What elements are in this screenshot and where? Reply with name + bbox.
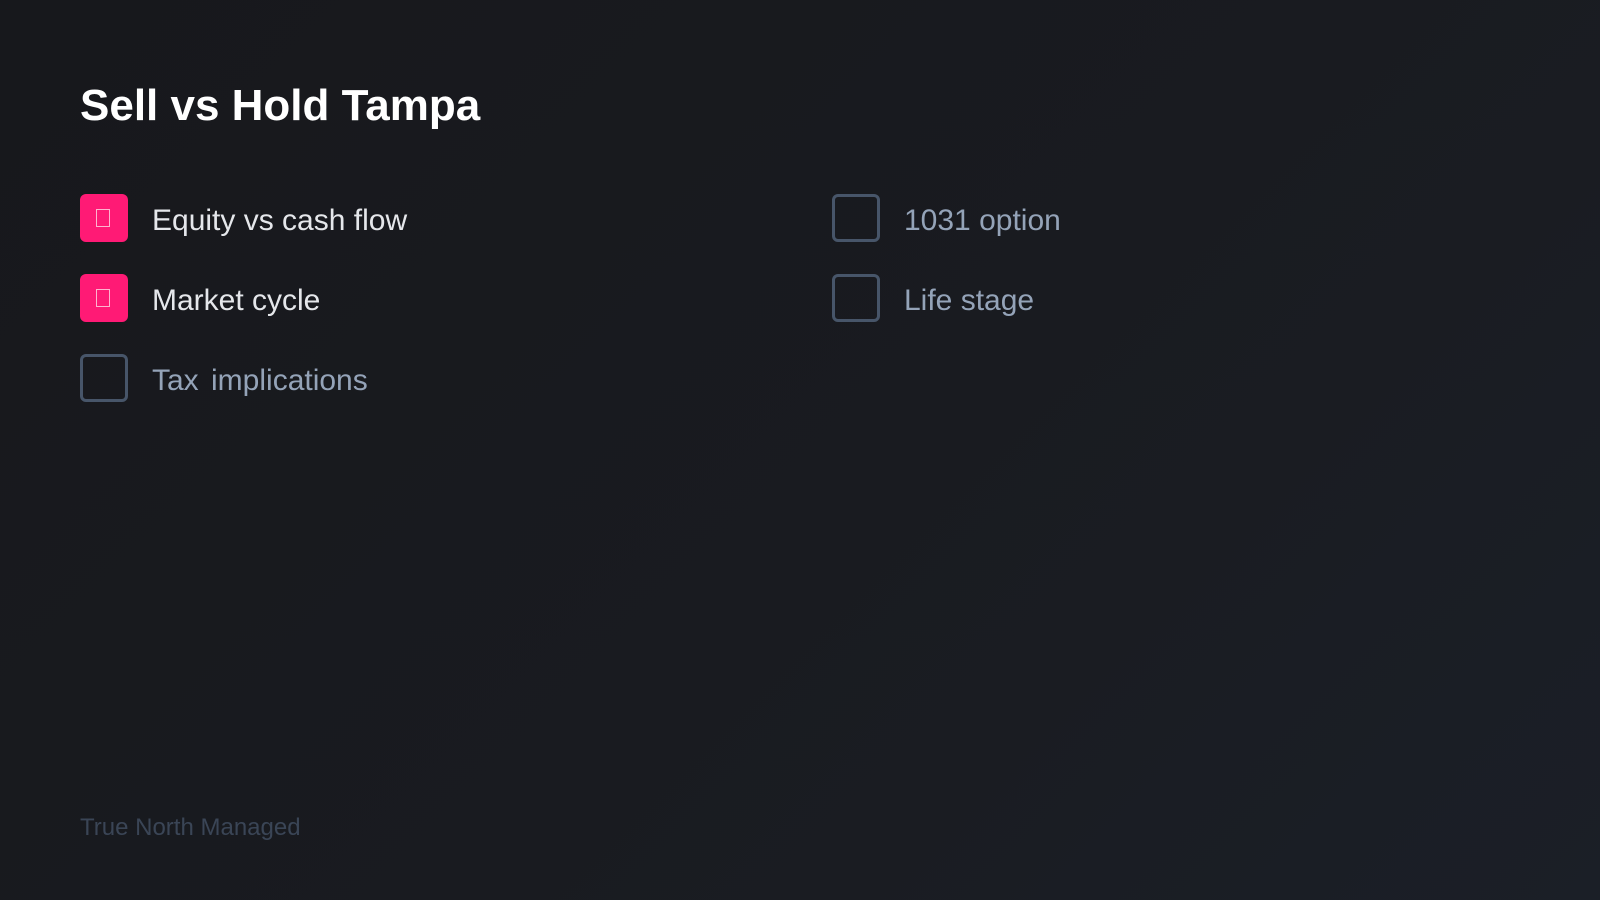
item: Market cycle	[80, 274, 320, 322]
footer: True North Managed	[80, 814, 301, 841]
item: Equity vs cash flow	[80, 194, 408, 242]
item: 1031 option	[832, 194, 1061, 242]
item: Tax implications	[80, 354, 368, 402]
item: Life stage	[832, 274, 1034, 322]
item: Market cycle: Market cycle	[152, 284, 320, 317]
item: Life stage: Life stage	[904, 284, 1034, 317]
title: Sell vs Hold Tampa	[80, 81, 480, 130]
item: 1031 option: 1031 option	[904, 204, 1061, 237]
item: Tax implications: Tax implications	[152, 364, 368, 397]
item: Equity vs cash flow: Equity vs cash flow	[152, 204, 407, 237]
